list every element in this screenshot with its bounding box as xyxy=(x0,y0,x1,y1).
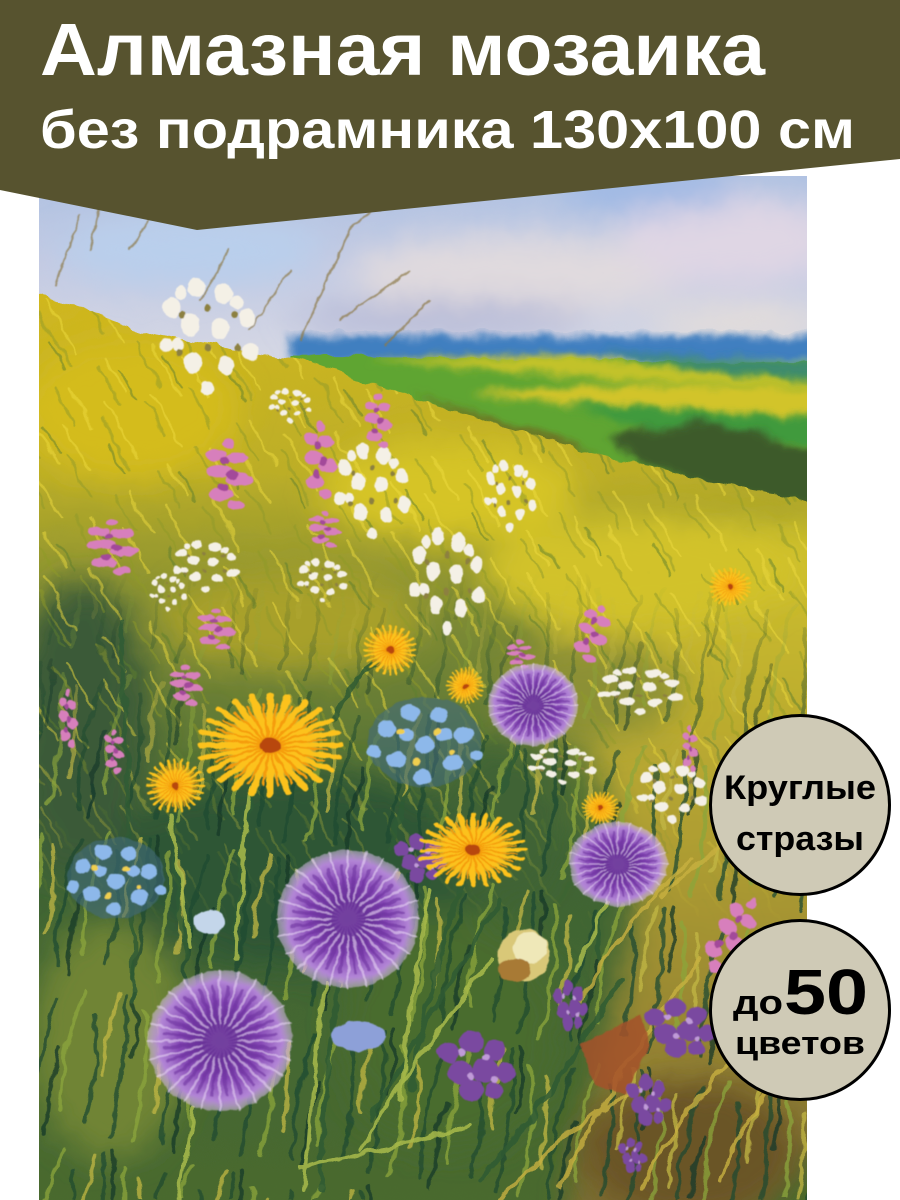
badge: round rhinestones: Круглые xyxy=(724,769,876,807)
tree line xyxy=(422,394,807,502)
blue forget-me-not clusters xyxy=(66,697,484,918)
grass texture: hillside xyxy=(39,298,807,912)
badge: up to 50 colours: до xyxy=(733,984,783,1022)
header banner xyxy=(0,0,900,230)
grass strokes xyxy=(120,620,800,1200)
distant horizon and fields xyxy=(290,336,900,580)
sky with clouds xyxy=(39,176,807,363)
flowers layer xyxy=(55,205,771,1173)
sky grass seed heads xyxy=(55,205,430,345)
small dark purple flowers xyxy=(194,834,717,1173)
grass texture: foreground xyxy=(39,581,807,1200)
white flower clusters xyxy=(150,278,707,824)
badge: up to 50 colours: 50 xyxy=(784,956,868,1028)
painting: wildflower meadow xyxy=(39,176,807,1200)
badge: round rhinestones xyxy=(710,716,890,894)
pale flower bud xyxy=(498,929,550,982)
subtitle: без подрамника 130х100 см xyxy=(40,100,855,160)
badge: up to 50 colours: цветов xyxy=(735,1025,865,1061)
title: Алмазная мозаика xyxy=(40,8,766,91)
pink flower spikes xyxy=(59,393,771,979)
yellow dandelions xyxy=(147,569,750,886)
yellow hillside and foreground base xyxy=(39,294,807,1200)
purple pom flowers xyxy=(148,664,667,1111)
orange-red foliage xyxy=(580,1015,650,1095)
badge: up to 50 colours xyxy=(710,920,890,1100)
badge: round rhinestones: стразы xyxy=(736,820,864,858)
